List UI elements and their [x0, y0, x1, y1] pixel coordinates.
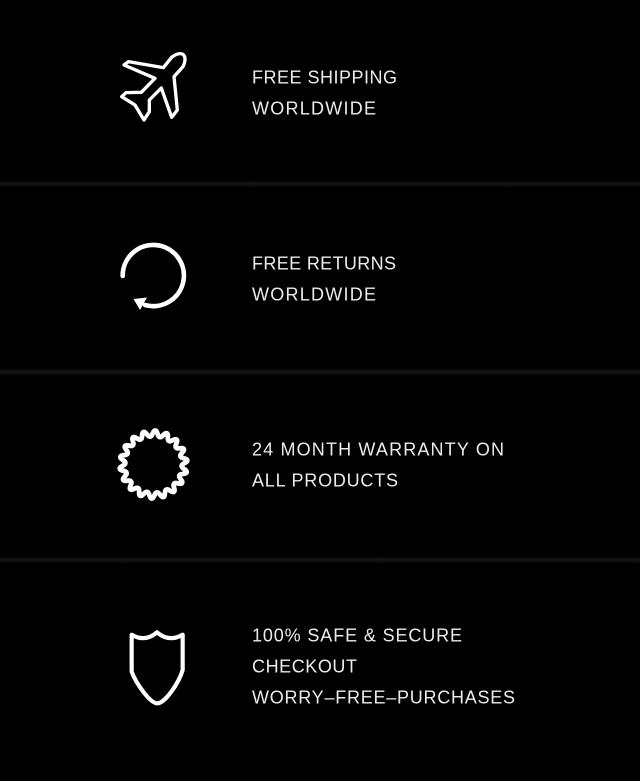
text: free shipping worldwide [252, 68, 397, 118]
text: safe checkout [252, 626, 515, 708]
text: free shipping worldwide: WORLDWIDE [252, 98, 376, 118]
icon: airplane [122, 54, 185, 120]
icon: wavy seal [117, 429, 190, 500]
icon: shield [132, 632, 183, 703]
panel: free returns [123, 245, 396, 310]
text: free returns worldwide [252, 254, 396, 304]
text: warranty: ALL PRODUCTS [252, 470, 398, 490]
panel: warranty [117, 429, 504, 500]
text: safe checkout: 100% SAFE & SECURE [252, 626, 462, 646]
text: warranty: 24 MONTH WARRANTY ON [252, 440, 504, 460]
icon: return arrow [123, 245, 184, 310]
panel: safe checkout [132, 626, 515, 708]
text: free returns worldwide: WORLDWIDE [252, 284, 376, 304]
text: safe checkout: WORRY–FREE–PURCHASES [252, 688, 515, 708]
panel: free shipping [122, 54, 397, 120]
text: warranty [252, 440, 504, 490]
text: free shipping worldwide: FREE SHIPPING [252, 68, 397, 88]
text: safe checkout: CHECKOUT [252, 656, 357, 676]
text: free returns worldwide: FREE RETURNS [252, 254, 396, 274]
